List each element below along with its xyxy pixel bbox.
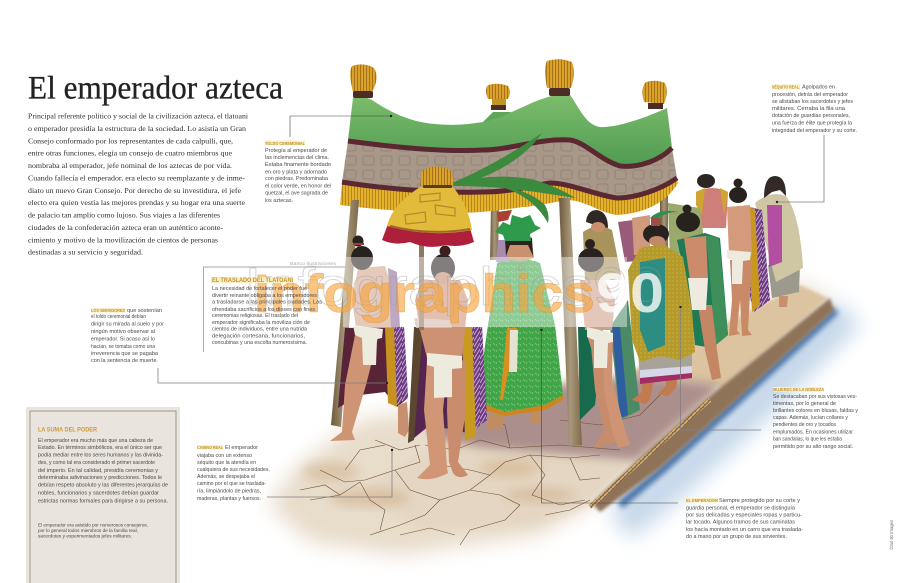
intro text: Principal referente político y social de la civilización azteca, el tlatoani bbox=[28, 112, 248, 120]
callout: el emperador: los hacía montado en un carro que era traslada- bbox=[686, 527, 803, 533]
figure: attendant in green cape bbox=[676, 204, 728, 380]
headdress bbox=[495, 215, 541, 241]
intro text: Consejo conformado por los representantes de cada calpulli, que, bbox=[28, 136, 233, 145]
callout: los servidores: con la sentencia de muerte. bbox=[91, 358, 158, 364]
panel footnote: sacerdotes y experimentados jefes militares. bbox=[38, 534, 132, 539]
title: El emperador azteca bbox=[28, 70, 283, 106]
callout: séquito real: dotación de guardias personales, bbox=[772, 113, 850, 119]
callout: toldo ceremonial: el color verde, en honor del bbox=[265, 183, 331, 189]
watermark: Infographics90: Infographics90 bbox=[244, 257, 664, 317]
callout: camino real: cualquiera de sus necesidades. bbox=[197, 467, 270, 473]
panel body text: nobles, funcionarios y sacerdotes debían guardar bbox=[38, 490, 159, 496]
callout: camino real: El emperador bbox=[225, 445, 258, 451]
callout: toldo ceremonial bbox=[265, 115, 392, 204]
callout: toldo ceremonial: quetzal, el ave sagrada de bbox=[265, 190, 328, 196]
callout: camino real: CAMINO REAL bbox=[197, 445, 223, 450]
panel body text: del imperio. En tal calidad, presidía ceremonias y bbox=[38, 468, 158, 474]
figure: noble in yellow and teal cape bbox=[628, 211, 695, 404]
callout: toldo ceremonial: los aztecas. bbox=[265, 198, 293, 204]
callout: toldo ceremonial: Protegía al emperador de bbox=[265, 148, 327, 154]
finials front bbox=[350, 59, 574, 98]
panel footnote: El emperador era asistido por numerosos consejeros, bbox=[38, 522, 148, 527]
intro text: de palacio tan amplio como lujoso. Sus viajes a las diferentes bbox=[28, 210, 220, 220]
callout: camino real: maderas, plantas y fuersos. bbox=[197, 496, 261, 502]
intro text: destinadas a su servicio y seguridad. bbox=[28, 248, 143, 257]
panel body text: determinaba adivinaciones y predicciones. Todos le bbox=[38, 475, 162, 481]
intro text: entre otras funciones, elegía un consejo de cuatro miembros que bbox=[28, 149, 233, 158]
intro text: electo era quien vestía las mejores prendas y su hogar era una suerte bbox=[28, 198, 246, 207]
panel body text: Estado. En términos simbólicos, era el único ser que bbox=[38, 445, 162, 451]
intro text: diato un nuevo Gran Consejo. Por derecho de su investidura, el jefe bbox=[28, 186, 242, 195]
callout: mujeres de la nobleza: MUJERES DE LA NOBLEZA bbox=[773, 387, 825, 392]
callout: el emperador bbox=[540, 329, 803, 540]
callout: camino real: camino por el que se traslada- bbox=[197, 481, 266, 487]
figure: rear bearer with pink torso bbox=[696, 174, 728, 228]
callout: los servidores: hacían, se tomaba como una bbox=[91, 344, 155, 350]
callout: el traslado del tlatoani: concubinas y una escolta numerosísima. bbox=[212, 340, 307, 346]
callout: los servidores: que sostenían bbox=[127, 308, 162, 314]
figure: left front bearer bbox=[330, 236, 409, 441]
callout: camino real: viajaba con un extenso bbox=[197, 453, 252, 459]
callout: mujeres de la nobleza: brillantes colores en blusas, faldas y bbox=[773, 408, 858, 414]
intro text: o emperador presidía la estructura de la sociedad. Lo asistía un Gran bbox=[28, 124, 246, 133]
callout: el traslado del tlatoani: Banco Ilustraciones bbox=[290, 261, 337, 266]
callout: el traslado del tlatoani: emperador significaba la moviliza ción de bbox=[212, 320, 310, 326]
panel body text bbox=[38, 438, 168, 504]
panel body text: El emperador era mucho más que una cabeza de bbox=[38, 438, 153, 444]
intro text: Cuando fallecía el emperador, era electo su reemplazante y de inme- bbox=[28, 173, 245, 182]
callout: camino real: Además, se despejaba el bbox=[197, 474, 255, 480]
intro text bbox=[28, 112, 248, 257]
callout: mujeres de la nobleza: ban sandalias, lo que les estaba bbox=[773, 436, 842, 442]
panel footnote: por lo general todos miembros de la familia real, bbox=[38, 528, 138, 533]
panel footnote bbox=[38, 522, 148, 539]
callout: el traslado del tlatoani: cientos de individuos, entre una nutrida bbox=[212, 327, 307, 333]
panel heading: LA SUMA DEL PODER bbox=[38, 426, 97, 434]
figure: rear attendants in green and khaki bbox=[583, 203, 704, 280]
panel: la suma del poder bbox=[26, 407, 180, 583]
callout: séquito real: integridad del emperador y su corte. bbox=[772, 128, 857, 134]
intro text: cimiento y motivo de la movilización de cientos de personas bbox=[28, 235, 218, 244]
watermark band bbox=[343, 257, 627, 327]
canopy poles, left and right bbox=[331, 198, 582, 446]
callout: toldo ceremonial: con piedras. Predominaba bbox=[265, 176, 328, 182]
callout: los servidores: emperador. Si acaso así lo bbox=[91, 337, 155, 343]
callout: séquito real: Agolpados en bbox=[802, 85, 835, 91]
panel body text: debían respeto absoluto y las diferentes jerarquías de bbox=[38, 483, 168, 489]
callout: el emperador: Siempre protegido por su corte y bbox=[719, 498, 800, 504]
callout: séquito real: se alistaban los sacerdotes y jefes bbox=[772, 99, 853, 105]
callout: los servidores bbox=[91, 308, 388, 384]
intro text: nombraba al emperador, jefe nominal de los aztecas de por vida. bbox=[28, 161, 232, 170]
callout: el emperador: por sus delicadas y especiales ropas y particu- bbox=[686, 512, 802, 518]
callout: toldo ceremonial: las inclemencias del clima. bbox=[265, 155, 329, 161]
road cracks bbox=[300, 395, 660, 545]
canopy: ceremonial awning bbox=[340, 59, 678, 215]
figure: centre front bearer bbox=[408, 246, 487, 479]
callout: mujeres de la nobleza bbox=[679, 306, 858, 450]
callout: séquito real bbox=[772, 83, 857, 203]
figure: attendant with bare torso and purple cape bbox=[727, 178, 770, 336]
callout: el emperador: lar tocado. Algunos tramos de sus caminatas bbox=[686, 520, 795, 526]
finials bbox=[486, 81, 667, 110]
callout: el emperador: EL EMPERADOR bbox=[686, 498, 719, 503]
callout: camino real: séquito que la atendía en bbox=[197, 460, 256, 466]
callout: camino real: ría, limpiándolo de piedras, bbox=[197, 488, 261, 494]
callout: los servidores: dirigir su mirada al suelo y por bbox=[91, 322, 164, 328]
parasol with plumes bbox=[382, 133, 575, 330]
callout: toldo ceremonial: Estaba finamente bordado bbox=[265, 162, 331, 168]
callout: mujeres de la nobleza: capas. Además, lucían collares y bbox=[773, 415, 848, 421]
callout: el emperador: do a mano por un grupo de sus sirvientes. bbox=[686, 534, 787, 540]
watermark: Infographics90: Infographics bbox=[254, 264, 595, 324]
callout: el traslado del tlatoani bbox=[204, 261, 345, 352]
illustration: stone road and water bbox=[268, 283, 848, 555]
panel body text: des, y como tal era considerado el primer sacerdote bbox=[38, 460, 155, 466]
callout: el traslado del tlatoani: a trasladarse a las principales ciudades. Las bbox=[212, 300, 322, 306]
callout: el traslado del tlatoani: ofrendaba sacrificios a los dioses con fines bbox=[212, 307, 315, 313]
callout: los servidores: el toldo ceremonial debían bbox=[91, 314, 146, 320]
callout: mujeres de la nobleza: permitido por su alto rango social. bbox=[773, 444, 853, 450]
callout: séquito real: militares. Cerraba la fila una bbox=[772, 106, 845, 112]
callout: toldo ceremonial: en oro y plata y adornado bbox=[265, 169, 327, 175]
callout: el traslado del tlatoani: ceremonias religiosas. El traslado del bbox=[212, 313, 298, 319]
callout: los servidores: ningún motivo observar al bbox=[91, 329, 155, 335]
figure: right front bearer bbox=[578, 239, 640, 448]
callout: los servidores: LOS SERVIDORES bbox=[91, 308, 125, 313]
rear canopy poles bbox=[490, 195, 668, 260]
callout: el traslado del tlatoani: La necesidad de fortalecer el poder fue bbox=[212, 286, 307, 292]
callout: séquito real: una fuerza de élite que protegía la bbox=[772, 120, 852, 126]
callout: mujeres de la nobleza: emplumados. En ocasiones utilizar bbox=[773, 430, 853, 436]
figure: séquito woman in cream cape bbox=[755, 176, 803, 307]
callout: los servidores: irreverencia que se pagaba bbox=[91, 351, 158, 357]
callout: el traslado del tlatoani: divertir reinante obligaba a los emperadores bbox=[212, 293, 317, 299]
callout: el traslado del tlatoani: delegación cortesana, funcionarios, bbox=[212, 334, 305, 340]
callout: toldo ceremonial: TOLDO CEREMONIAL bbox=[265, 141, 305, 146]
figure: emperor in green cape bbox=[480, 210, 563, 431]
panel body text: estrictas normas formales para dirigirse a su persona. bbox=[38, 498, 168, 504]
callout: el emperador: guardia personal, el emperador se distinguía bbox=[686, 506, 795, 512]
callout: séquito real: procesión, detrás del emperador bbox=[772, 92, 848, 98]
callout: séquito real: SÉQUITO REAL. bbox=[772, 83, 800, 90]
plumes bbox=[452, 133, 575, 223]
callout: mujeres de la nobleza: timentas, por lo general de bbox=[773, 401, 836, 407]
callout: mujeres de la nobleza: Se destacaban por sus vistosas ves- bbox=[773, 394, 857, 400]
callout: mujeres de la nobleza: pendientes de oro y tocados bbox=[773, 422, 836, 428]
copyright credit: ©Sol 90 Images bbox=[888, 519, 894, 550]
intro text: ciudades de la confederación azteca eran un auténtico aconte- bbox=[28, 223, 223, 232]
callout: camino real bbox=[197, 445, 393, 502]
watermark: Infographics90: 90 bbox=[596, 261, 664, 324]
callout: el traslado del tlatoani: EL TRASLADO DEL TLATOANI bbox=[212, 277, 293, 284]
panel body text: podía mediar entre los seres humanos y las divinida- bbox=[38, 452, 163, 458]
